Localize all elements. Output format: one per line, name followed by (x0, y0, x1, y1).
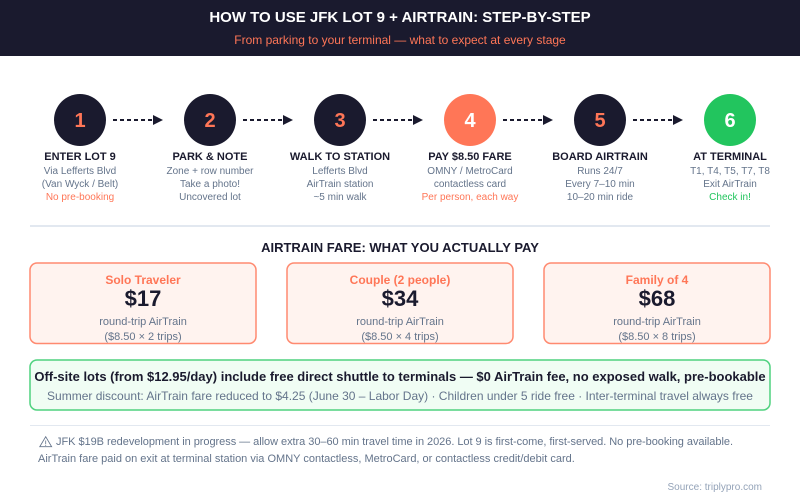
step 2: Uncovered lot (179, 192, 241, 203)
off-site lots callout: Summer discount: AirTrain fare reduced to $4.25 (June 30 – Labor Day) · Children under 5 ride free · Inter-terminal travel always free (47, 389, 753, 403)
fare section heading: AIRTRAIN FARE: WHAT YOU ACTUALLY PAY (261, 240, 539, 255)
step 1 (42, 94, 118, 203)
fare card: family: $68 (639, 286, 675, 311)
step 3: 3 (334, 110, 346, 132)
source line: Source: triplypro.com (668, 482, 762, 493)
header banner (0, 0, 800, 56)
fare card: solo: round-trip AirTrain (99, 316, 187, 328)
fare card: family: Family of 4 (626, 273, 689, 287)
step 2: Zone + row number (166, 166, 254, 177)
step 5: Runs 24/7 (577, 166, 623, 177)
step 4: 4 (464, 110, 476, 132)
fare card: solo (30, 263, 256, 344)
step 5: 5 (594, 110, 606, 132)
fare card: family: round-trip AirTrain (613, 316, 701, 328)
step 6: Check in! (709, 192, 751, 203)
step 6: AT TERMINAL (693, 151, 767, 163)
step 6: 6 (724, 110, 736, 132)
step 3: AirTrain station (307, 179, 373, 190)
step 3 (290, 94, 390, 203)
step 2: Take a photo! (180, 179, 240, 190)
step 6: T1, T4, T5, T7, T8 (690, 166, 770, 177)
step 5: Every 7–10 min (565, 179, 635, 190)
footnote: JFK $19B redevelopment in progress — allow extra 30–60 min travel time in 2026. Lot 9 is first-come, first-served. No pre-booking available. (56, 436, 733, 448)
step 4: OMNY / MetroCard (427, 166, 513, 177)
step 1: Via Lefferts Blvd (44, 166, 116, 177)
step 3: WALK TO STATION (290, 151, 390, 163)
step 1: ENTER LOT 9 (44, 151, 116, 163)
fare card: couple: $34 (382, 286, 419, 311)
step 4: Per person, each way (422, 192, 518, 203)
step 6 (690, 94, 770, 203)
step 2: 2 (204, 110, 216, 132)
fare card: couple: round-trip AirTrain (356, 316, 444, 328)
footnote: AirTrain fare paid on exit at terminal station via OMNY contactless, MetroCard, or contactless credit/debit card. (38, 453, 575, 465)
arrow 2 to 3 (243, 115, 293, 125)
fare card: family (544, 263, 770, 344)
warning icon (40, 437, 52, 447)
step 5 (552, 94, 648, 203)
step 5: 10–20 min ride (567, 192, 634, 203)
step 1: (Van Wyck / Belt) (42, 179, 118, 190)
off-site lots callout: Off-site lots (from $12.95/day) include free direct shuttle to terminals — $0 AirTrain fee, no exposed walk, pre-bookable (34, 369, 766, 384)
footnote (38, 436, 733, 465)
arrow 1 to 2 (113, 115, 163, 125)
step 2 (166, 94, 254, 203)
step 3: ~5 min walk (313, 192, 368, 203)
step 4: PAY $8.50 FARE (428, 151, 512, 163)
step 3: Lefferts Blvd (312, 166, 368, 177)
fare card: couple: Couple (2 people) (350, 273, 450, 287)
arrow 4 to 5 (503, 115, 553, 125)
step 1: 1 (74, 110, 86, 132)
step 2: PARK & NOTE (173, 151, 247, 163)
arrow 5 to 6 (633, 115, 683, 125)
fare card: couple (287, 263, 513, 344)
title: HOW TO USE JFK LOT 9 + AIRTRAIN: STEP-BY-STEP (209, 9, 591, 26)
arrow 3 to 4 (373, 115, 423, 125)
step 4 (422, 94, 518, 203)
fare card: solo: Solo Traveler (105, 273, 181, 287)
fare card: couple: ($8.50 × 4 trips) (361, 331, 439, 343)
step 6: Exit AirTrain (703, 179, 757, 190)
off-site lots callout (30, 360, 770, 410)
fare card: solo: ($8.50 × 2 trips) (104, 331, 182, 343)
fare card: family: ($8.50 × 8 trips) (618, 331, 696, 343)
step 1: No pre-booking (46, 192, 114, 203)
step 4: contactless card (434, 179, 506, 190)
subtitle: From parking to your terminal — what to expect at every stage (234, 33, 566, 47)
fare card: solo: $17 (125, 286, 161, 311)
step 5: BOARD AIRTRAIN (552, 151, 648, 163)
